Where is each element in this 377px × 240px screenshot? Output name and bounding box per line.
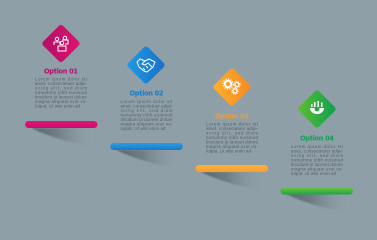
bar 03 (196, 165, 268, 172)
body text 04: Lorem ipsum dolor sit (291, 144, 344, 149)
body text 04: tincidunt ut laoreet dolore (291, 162, 344, 167)
shadow 03 (201, 172, 266, 191)
body text 01: Lorem ipsum dolor sit (35, 76, 88, 82)
icon: people on diamond (41, 24, 81, 63)
body text 04: amet, consectetuer adipi- (291, 148, 344, 154)
body text 01: magna aliquam erat vo- (35, 99, 88, 104)
body text 02: amet, consectetuer adipi- (120, 104, 173, 108)
body text 02: scing elit, sed diam (120, 108, 173, 113)
body text 02: magna aliquam erat vo- (120, 122, 173, 126)
shadow 02 (116, 150, 181, 169)
body text 03: nonummy nibh euismod (206, 135, 259, 140)
heading 03: Option 03 (215, 112, 249, 120)
panel: option 02 (110, 45, 183, 169)
body text 02: tincidunt ut laoreet dolore (120, 117, 173, 122)
body text 03: magna aliquam erat vo- (206, 144, 259, 149)
body text 02: lutpat. Ut wisi enim ad (120, 126, 166, 131)
shadow 01 (31, 128, 95, 147)
heading 02: Option 02 (130, 90, 164, 98)
icon: handshake on diamond (126, 45, 166, 85)
icon: gear and chart on diamond (297, 89, 337, 129)
icon: gears on diamond (212, 67, 252, 107)
panel: option 01 (25, 24, 98, 147)
body text 03: Lorem ipsum dolor sit (206, 122, 259, 126)
panel: option 04 (280, 89, 353, 213)
body text 03: scing elit, sed diam (206, 130, 258, 136)
shadow 04 (286, 194, 351, 213)
body text 02: nonummy nibh euismod (120, 112, 173, 118)
body text 04: magna aliquam erat vo- (291, 166, 344, 172)
body text 01: scing elit, sed diam (35, 86, 87, 90)
body text 01: amet, consectetuer adipi- (35, 81, 88, 86)
body text 02: Lorem ipsum dolor sit (120, 99, 173, 104)
body text 01: nonummy nibh euismod (35, 90, 88, 95)
body text 03: amet, consectetuer adipi- (206, 126, 259, 131)
body text 04: lutpat. Ut wisi enim ad (291, 171, 337, 176)
heading 04: Option 04 (300, 134, 334, 142)
body text 03: tincidunt ut laoreet dolore (206, 140, 259, 144)
heading 01: Option 01 (44, 68, 78, 76)
body text 01: tincidunt ut laoreet dolore (35, 94, 88, 100)
bar 01 (25, 121, 98, 128)
bar 04 (280, 188, 353, 194)
bar 02 (110, 143, 183, 150)
body text 04: scing elit, sed diam (291, 153, 343, 158)
body text 04: nonummy nibh euismod (291, 158, 344, 162)
body text 03: lutpat. Ut wisi enim ad (206, 148, 252, 154)
body text 01: lutpat. Ut wisi enim ad (35, 104, 81, 108)
panel: option 03 (196, 67, 268, 191)
